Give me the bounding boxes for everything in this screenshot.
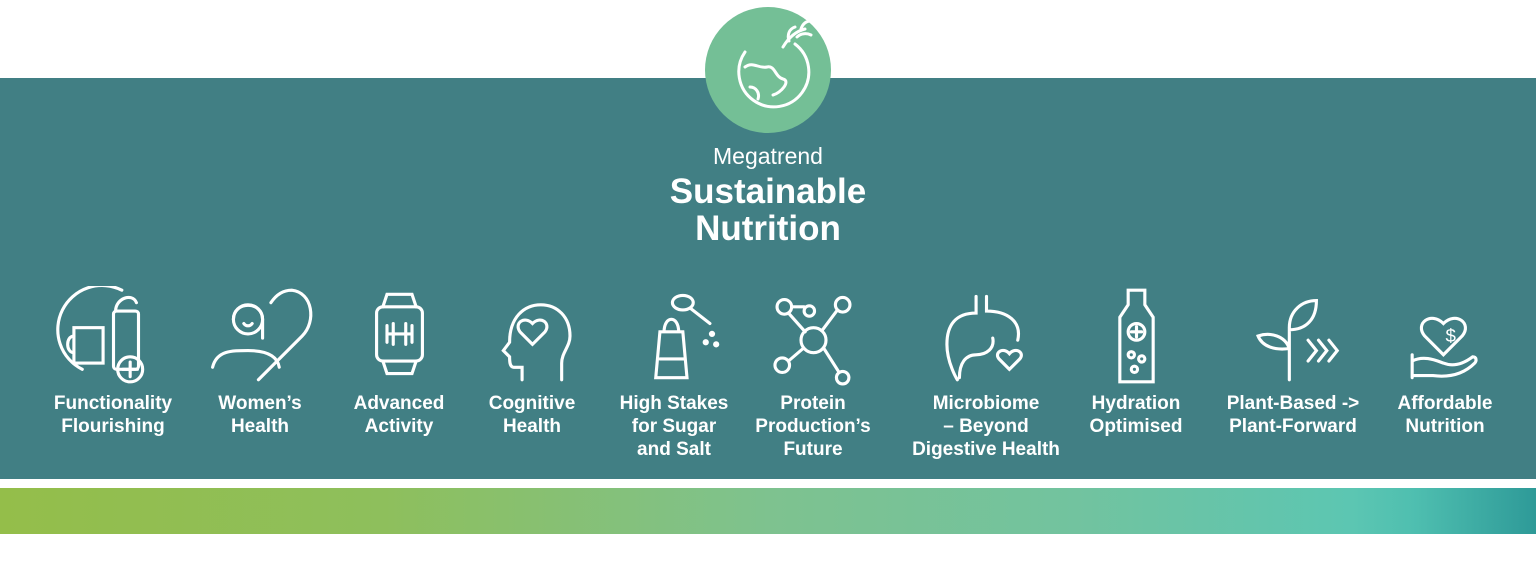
item: plant-based: Plant-Based -> <box>1227 393 1359 414</box>
title: Nutrition <box>695 209 841 248</box>
item: plant-based <box>1227 299 1359 437</box>
item: women's health: Health <box>231 416 289 437</box>
item: cognitive health <box>489 303 575 437</box>
item: affordable <box>1398 316 1492 437</box>
item: microbiome <box>912 294 1060 460</box>
item: advanced activity <box>354 292 444 437</box>
heading: megatrend: Megatrend <box>713 143 823 169</box>
item: protein: Production’s <box>755 416 871 437</box>
item: functionality: Flourishing <box>61 416 165 437</box>
icon: globe with leaves <box>705 7 831 133</box>
gradient bar <box>0 488 1536 534</box>
item: protein <box>755 296 871 460</box>
item: cognitive health: Cognitive <box>489 393 575 414</box>
item: sugar and salt <box>620 294 728 460</box>
title: Sustainable <box>670 172 866 211</box>
title <box>670 172 866 248</box>
item: plant-based: Plant-Forward <box>1229 416 1357 437</box>
item: cognitive health: Health <box>503 416 561 437</box>
item: women's health <box>211 288 312 437</box>
item: functionality <box>54 286 172 437</box>
item: protein: Protein <box>780 393 846 414</box>
item: advanced activity: Advanced <box>354 393 444 414</box>
item: women's health: Women’s <box>218 393 302 414</box>
item: functionality: Functionality <box>54 393 172 414</box>
item: advanced activity: Activity <box>365 416 433 437</box>
item: sugar and salt: for Sugar <box>632 416 716 437</box>
item: hydration: Optimised <box>1090 416 1182 437</box>
item: sugar and salt: High Stakes <box>620 393 728 414</box>
item: microbiome: Digestive Health <box>912 439 1060 460</box>
item: affordable: Affordable <box>1398 393 1492 414</box>
item: affordable: Nutrition <box>1405 416 1485 437</box>
item: hydration: Hydration <box>1092 393 1180 414</box>
item: hydration <box>1090 288 1182 437</box>
item: affordable: $ <box>1445 325 1456 346</box>
item: protein: Future <box>783 439 843 460</box>
item: sugar and salt: and Salt <box>637 439 711 460</box>
item: microbiome: Microbiome <box>933 393 1039 414</box>
item: microbiome: – Beyond <box>943 416 1029 437</box>
